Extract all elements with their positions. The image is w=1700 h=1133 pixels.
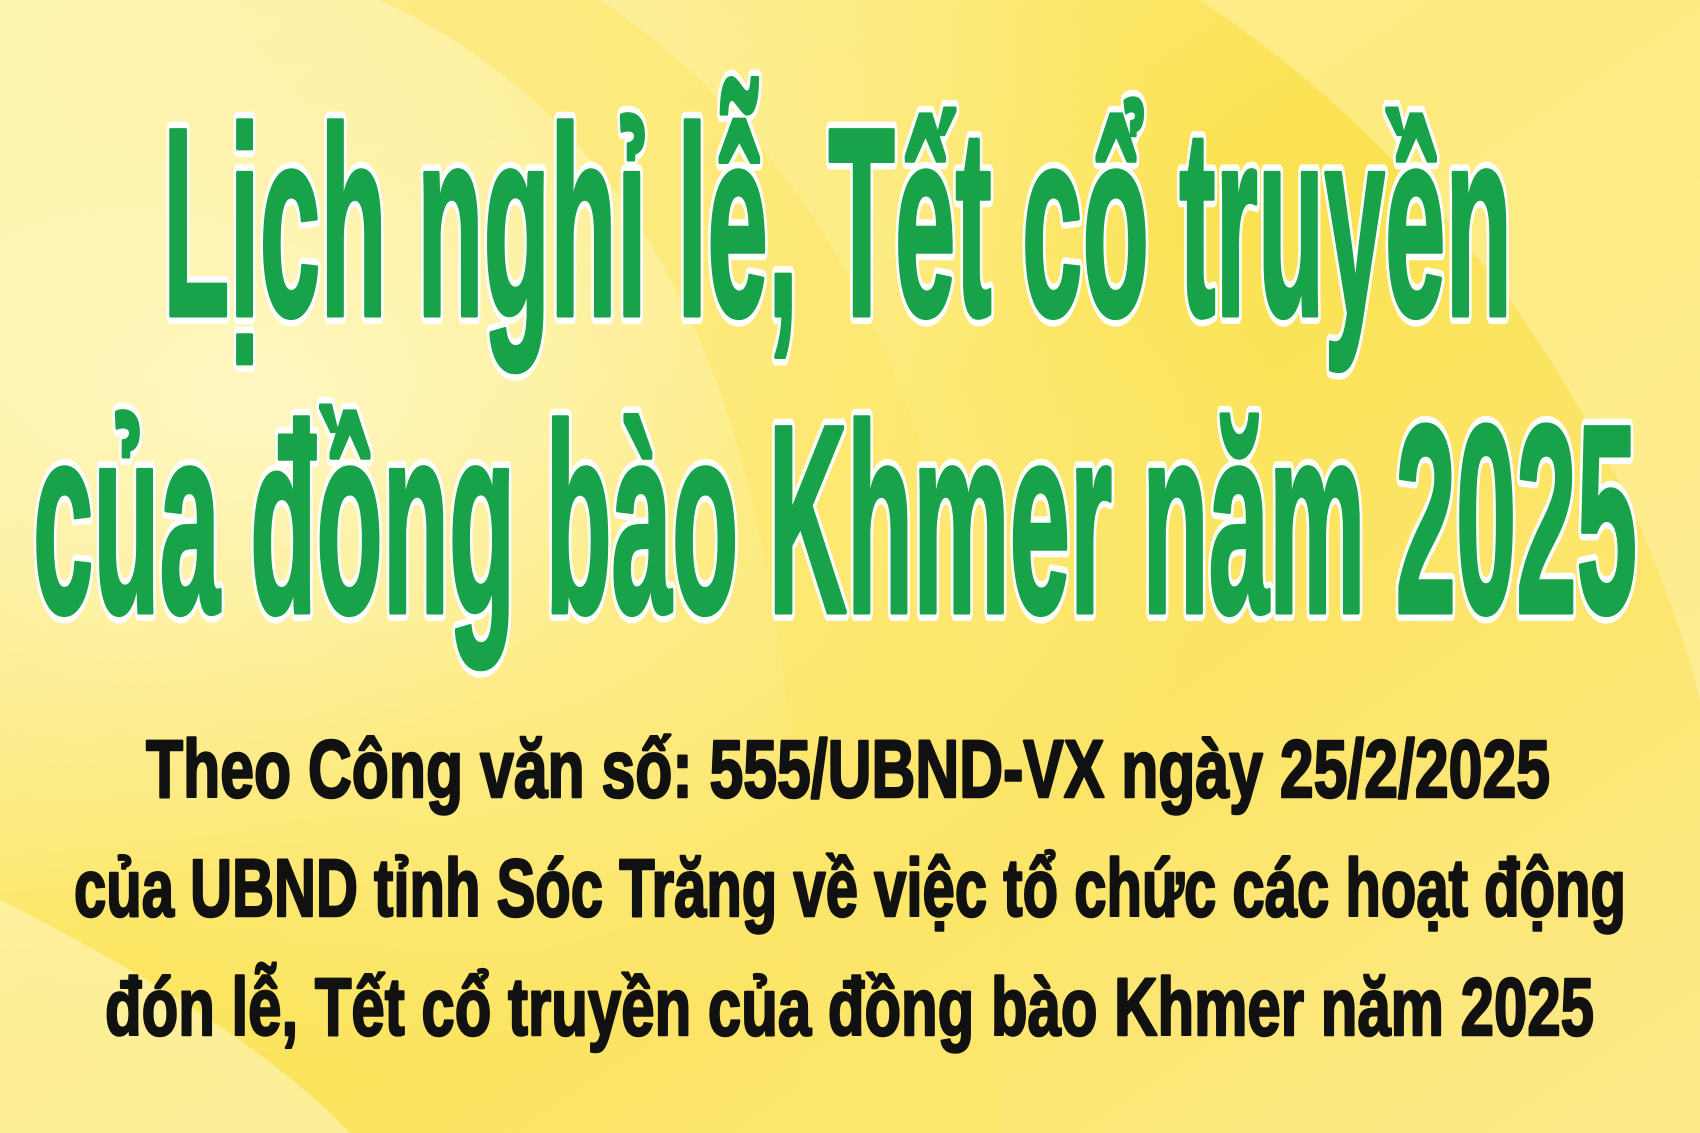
title (33, 72, 1637, 671)
subtitle: document reference (74, 724, 1626, 1053)
